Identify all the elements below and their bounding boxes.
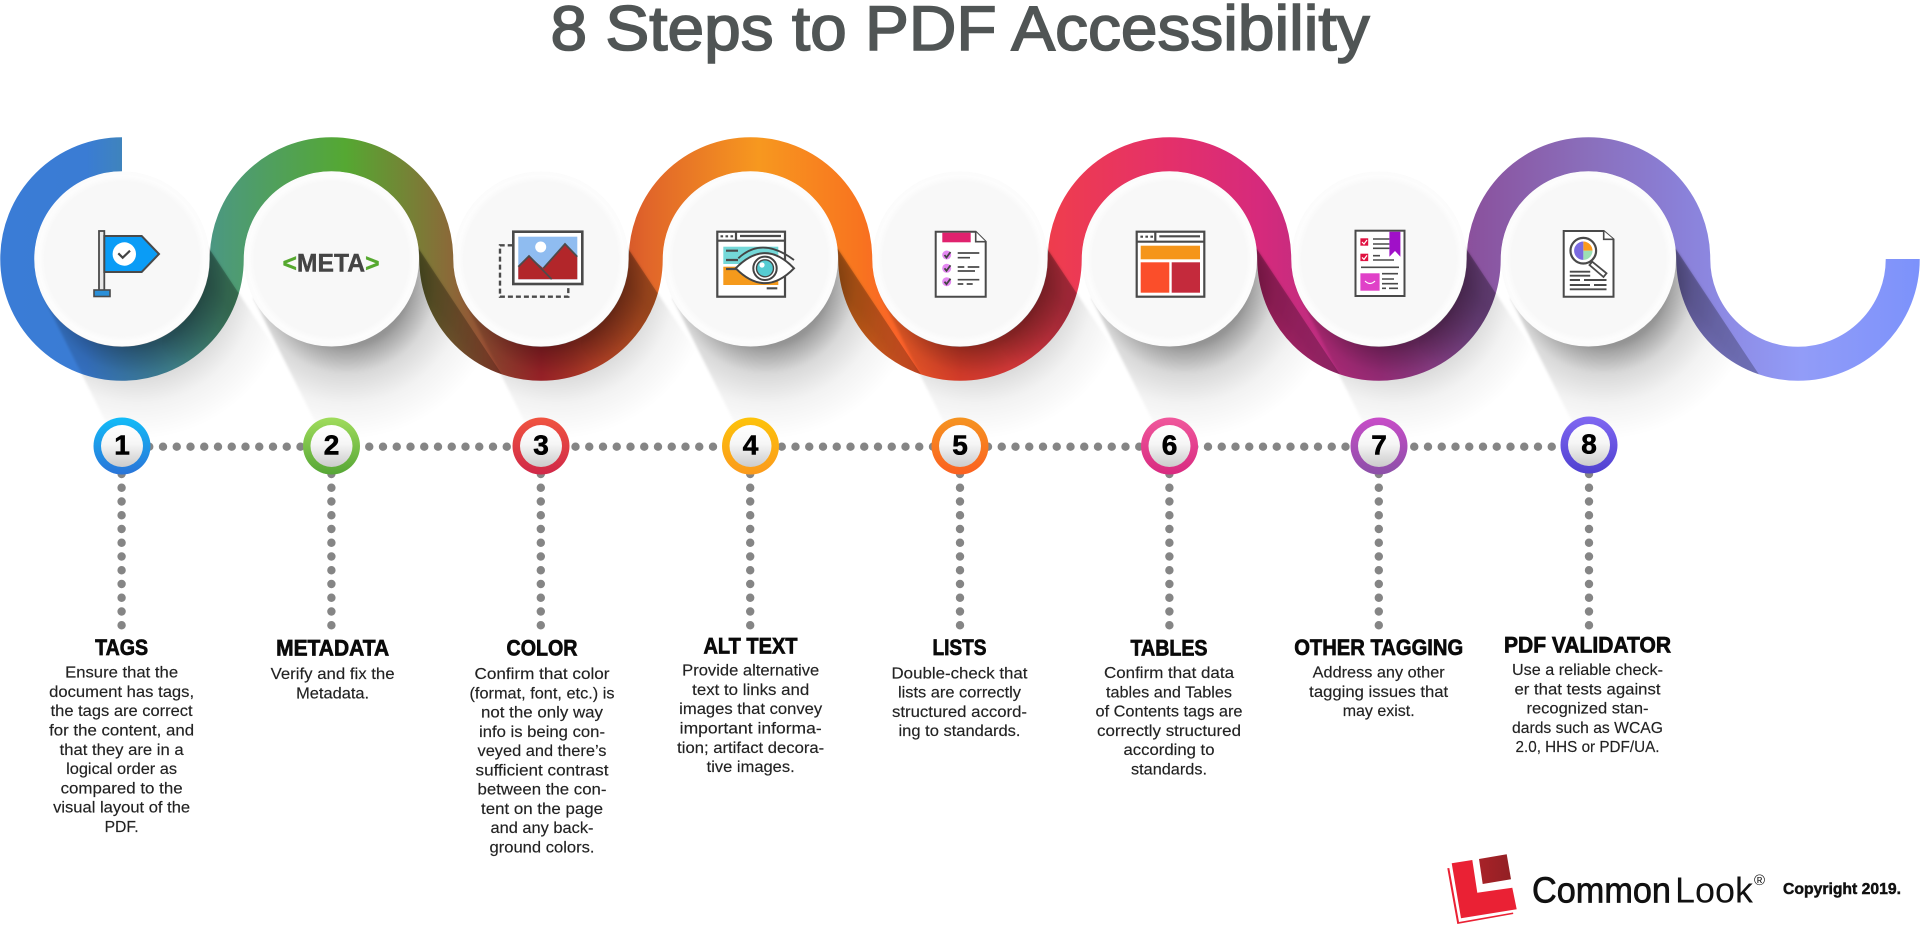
step 3 text: color	[470, 636, 614, 856]
icon: page layout	[1137, 232, 1204, 297]
step 3 text: color: COLOR	[506, 636, 578, 661]
step 4 text: alt text: important informa-	[680, 720, 822, 738]
step 3 text: color: Confirm that color	[474, 666, 610, 683]
disc 7 with tagged form icon	[1292, 172, 1466, 346]
marker 6: 6	[1162, 430, 1177, 460]
step 3 text: color: ground colors.	[490, 839, 594, 856]
step 3 text: color: (format, font, etc.) is	[470, 685, 614, 702]
step 2 text: metadata: Verify and fix the	[271, 666, 395, 683]
marker 4	[722, 418, 779, 474]
step 1 text: tags: the tags are correct	[51, 703, 193, 720]
step 3 text: color: and any back-	[490, 820, 594, 837]
step 2 text: metadata	[271, 636, 395, 702]
step 7 text: other tagging: tagging issues that	[1309, 684, 1449, 701]
wordmark: Common	[1532, 870, 1671, 911]
logo: CommonLook	[1447, 854, 1901, 924]
step 7 text: other tagging	[1294, 635, 1463, 720]
copyright note: Copyright 2019.	[1783, 881, 1901, 898]
marker 8	[1560, 416, 1618, 474]
step 6 text: tables: of Contents tags are	[1096, 704, 1243, 720]
step 8 text: pdf validator: Use a reliable check-	[1512, 662, 1663, 679]
step 4 text: alt text: tive images.	[707, 759, 795, 776]
step 6 text: tables: according to	[1124, 742, 1215, 759]
step 4 text: alt text: tion; artifact decora-	[677, 740, 824, 757]
step 3 text: color: info is being con-	[479, 724, 605, 741]
step 8 text: pdf validator: er that tests against	[1514, 681, 1661, 698]
icon: logo mark	[1447, 854, 1517, 924]
step 5 text: lists: LISTS	[932, 635, 986, 660]
step 8 text: pdf validator: 2.0, HHS or PDF/UA.	[1516, 739, 1660, 756]
marker 3: 3	[533, 430, 549, 460]
marker 5	[932, 418, 988, 474]
shadow wedges on ribbon	[181, 248, 1759, 374]
step 6 text: tables: correctly structured	[1097, 723, 1241, 740]
step 3 text: color: veyed and there’s	[478, 743, 606, 760]
step 4 text: alt text: images that convey	[679, 701, 822, 718]
disc 6 with layout icon	[1082, 172, 1257, 346]
marker 1: 1	[114, 430, 130, 460]
icon: picture	[500, 232, 582, 297]
step 5 text: lists: Double-check that	[892, 665, 1028, 682]
step 1 text: tags: TAGS	[95, 635, 148, 660]
marker 6	[1141, 418, 1198, 474]
icon: eye over window	[717, 232, 794, 297]
step 6 text: tables: TABLES	[1130, 635, 1208, 660]
numbered markers	[94, 416, 1618, 474]
step 1 text: tags: that they are in a	[60, 742, 184, 759]
marker 2: 2	[324, 430, 339, 460]
step 8 text: pdf validator: PDF VALIDATOR	[1504, 632, 1671, 657]
wordmark: ®	[1754, 872, 1765, 889]
step 1 text: tags	[49, 635, 194, 836]
step 6 text: tables: standards.	[1131, 761, 1207, 778]
step 4 text: alt text	[677, 634, 824, 776]
step 2 text: metadata: METADATA	[276, 636, 389, 661]
icon: tagged form	[1356, 231, 1404, 296]
marker 2	[303, 418, 360, 474]
step 1 text: tags: document has tags,	[49, 684, 194, 701]
serpentine gradient ribbon	[17, 154, 1903, 364]
icon: flag	[94, 231, 159, 296]
step 3 text: color: between the con-	[478, 782, 606, 799]
step 6 text: tables	[1096, 635, 1243, 778]
disc 5 with checklist icon	[872, 172, 1048, 346]
step 6 text: tables: tables and Tables	[1106, 684, 1232, 701]
marker 3	[512, 418, 570, 474]
step 4 text: alt text: Provide alternative	[682, 663, 819, 680]
step 1 text: tags: for the content, and	[49, 722, 194, 740]
icon: meta tag text: <META>	[282, 250, 380, 278]
step 2 text: metadata: Metadata.	[296, 685, 369, 702]
wordmark	[1532, 870, 1765, 911]
disc 3 with image icon	[454, 172, 628, 346]
step 1 text: tags: visual layout of the	[53, 800, 190, 817]
step 5 text: lists	[892, 635, 1028, 740]
step 6 text: tables: Confirm that data	[1104, 665, 1234, 682]
step 1 text: tags: compared to the	[61, 780, 183, 797]
disc 4 with eye icon	[663, 172, 838, 346]
step 5 text: lists: lists are correctly	[898, 685, 1021, 702]
disc 8 with validator icon	[1501, 172, 1676, 346]
marker 7	[1350, 418, 1408, 474]
soft disc shadows	[44, 247, 1785, 468]
step 7 text: other tagging: OTHER TAGGING	[1294, 635, 1463, 660]
step 5 text: lists: structured accord-	[892, 704, 1027, 721]
marker 7: 7	[1371, 430, 1387, 460]
step 3 text: color: sufficient contrast	[476, 762, 609, 779]
wordmark: Look	[1675, 870, 1754, 911]
panel: icon discs	[34, 172, 1676, 346]
marker 4: 4	[743, 430, 759, 460]
step 4 text: alt text: ALT TEXT	[704, 634, 798, 658]
step 3 text: color: tent on the page	[481, 801, 603, 818]
marker 5: 5	[952, 430, 968, 460]
step 7 text: other tagging: may exist.	[1343, 703, 1415, 720]
dotted connector lines	[122, 447, 1589, 626]
disc 2 with meta tag	[244, 172, 419, 346]
step 1 text: tags: PDF.	[105, 819, 139, 836]
step 7 text: other tagging: Address any other	[1313, 665, 1445, 682]
step 8 text: pdf validator	[1504, 632, 1671, 756]
icon: checklist document	[936, 232, 986, 297]
step 1 text: tags: Ensure that the	[65, 665, 178, 682]
step 8 text: pdf validator: dards such as WCAG	[1512, 720, 1663, 737]
step 4 text: alt text: text to links and	[692, 682, 809, 699]
step 1 text: tags: logical order as	[66, 761, 177, 778]
step 8 text: pdf validator: recognized stan-	[1526, 700, 1648, 718]
disc 1 with flag icon	[34, 172, 210, 346]
step 5 text: lists: ing to standards.	[898, 723, 1020, 740]
marker 8: 8	[1581, 428, 1597, 460]
step 3 text: color: not the only way	[481, 704, 603, 722]
icon: magnifier on document	[1564, 231, 1614, 297]
marker 1	[94, 418, 150, 474]
